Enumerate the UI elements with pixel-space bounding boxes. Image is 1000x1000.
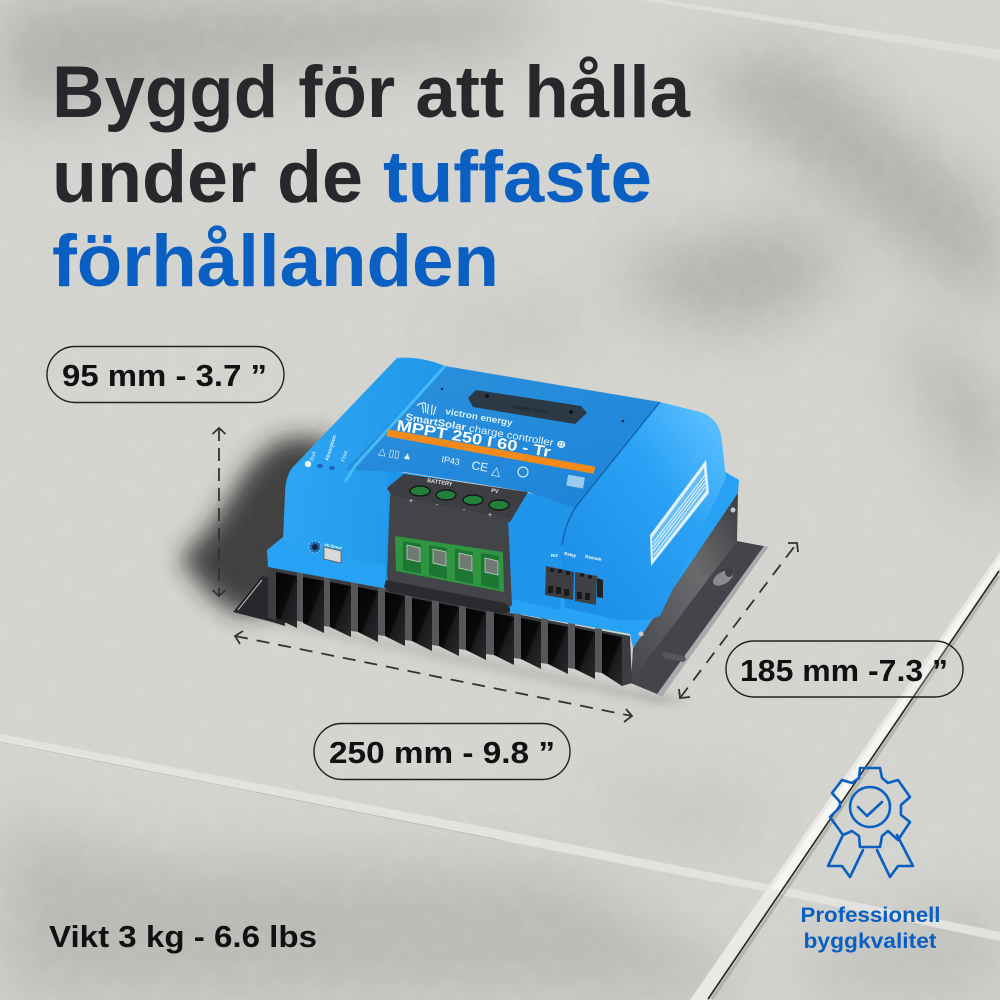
certification marks: △ ▯▯ ▲ bbox=[377, 446, 413, 463]
terminal block: PV bbox=[491, 488, 499, 495]
terminal labels: BATTERY bbox=[427, 478, 453, 488]
certification marks: CE bbox=[470, 458, 489, 475]
terminal block: - bbox=[463, 507, 466, 514]
product name: SmartSolar charge controller ⊕ bbox=[404, 412, 567, 451]
VE.Direct port: VE.Direct bbox=[324, 542, 343, 551]
badge caption: Professionell bbox=[800, 904, 940, 927]
label: depth bbox=[726, 641, 963, 697]
heat sink mounting bolts bbox=[662, 567, 736, 662]
terminal housing front bbox=[387, 495, 512, 611]
mounting plate left bbox=[233, 576, 285, 626]
brand logo bbox=[416, 402, 513, 428]
weight: Vikt 3 kg - 6.6 lbs bbox=[49, 919, 317, 954]
status LED labels: Bulk bbox=[309, 450, 318, 462]
title: tuffaste bbox=[383, 137, 652, 218]
label: height bbox=[47, 346, 284, 402]
terminal block: + bbox=[488, 512, 492, 519]
icon: quality badge bbox=[828, 768, 913, 877]
display option plate bbox=[468, 390, 587, 424]
heat sink slots bbox=[276, 572, 622, 686]
VE.Direct port bbox=[309, 541, 343, 563]
terminal openings bbox=[410, 486, 509, 510]
display option plate: display option bbox=[512, 404, 549, 416]
blue base flange bbox=[267, 470, 739, 648]
terminal block bbox=[384, 474, 528, 614]
label: depth: 185 mm -7.3 ” bbox=[740, 653, 948, 688]
remote connector: Relay bbox=[564, 551, 577, 558]
remote connector bbox=[545, 551, 603, 605]
badge caption: byggkvalitet bbox=[804, 930, 936, 953]
fin ground shadow bbox=[238, 612, 690, 702]
enclosure right cover bbox=[560, 402, 726, 620]
certification marks: △ bbox=[490, 463, 503, 479]
brand logo: victron energy bbox=[445, 406, 513, 428]
label: height: 95 mm - 3.7 ” bbox=[62, 358, 267, 393]
screws bbox=[638, 508, 736, 636]
terminal block: - bbox=[436, 502, 439, 509]
device: MPPT solar charge controller bbox=[233, 358, 768, 696]
title bbox=[52, 52, 691, 302]
title: Byggd för att hålla bbox=[52, 52, 691, 133]
enclosure front bbox=[385, 470, 570, 610]
vent dots bbox=[441, 388, 624, 422]
terminal housing top bbox=[387, 474, 528, 522]
status LED labels: Float bbox=[340, 450, 350, 463]
enclosure left body bbox=[283, 358, 445, 566]
label panel on side bbox=[650, 460, 709, 566]
model name: MPPT 250 I 60 - Tr bbox=[395, 417, 552, 461]
label: width: 250 mm - 9.8 ” bbox=[329, 735, 555, 770]
terminal block: + bbox=[409, 498, 413, 505]
orange stripe bbox=[385, 429, 596, 474]
certification marks: IP43 bbox=[441, 454, 461, 467]
left edge highlight bbox=[345, 366, 445, 482]
label: width bbox=[314, 724, 570, 780]
heat sink side bbox=[631, 493, 738, 681]
remote connector: Remote bbox=[585, 554, 602, 562]
heat sink fins bbox=[297, 572, 602, 673]
width dimension arrow bbox=[235, 631, 632, 722]
status LED labels: Absorption bbox=[324, 434, 338, 462]
mounting plate right bbox=[628, 541, 768, 696]
title: förhållanden bbox=[52, 221, 499, 302]
cover seam bbox=[562, 402, 660, 545]
status LED labels bbox=[305, 434, 350, 470]
enclosure top bbox=[345, 366, 660, 508]
remote connector: RO bbox=[551, 553, 558, 558]
green connector bbox=[395, 536, 504, 592]
height dimension arrow bbox=[212, 428, 226, 596]
depth dimension arrow bbox=[679, 543, 798, 698]
certification marks bbox=[377, 446, 585, 488]
device cast shadow bbox=[180, 436, 330, 615]
badge caption bbox=[800, 904, 940, 953]
heat sink front bbox=[268, 566, 632, 686]
title: under de bbox=[52, 137, 363, 218]
